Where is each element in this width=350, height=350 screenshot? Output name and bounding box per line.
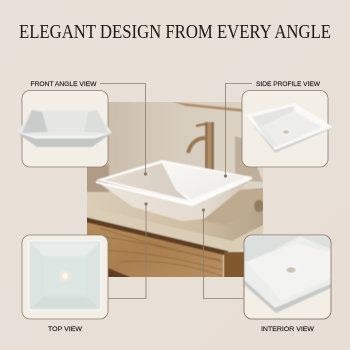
drain <box>59 270 71 282</box>
panel: interior view <box>242 233 333 319</box>
soap dish <box>254 200 264 212</box>
panel: front angle view <box>17 90 112 167</box>
countertop <box>85 188 265 241</box>
sink: interior close-up <box>242 233 333 313</box>
label: top view: TOP VIEW <box>48 326 82 333</box>
drain <box>282 130 290 134</box>
faucet <box>188 122 214 170</box>
label: interior view: INTERIOR VIEW <box>261 326 314 333</box>
vessel sink <box>96 160 252 221</box>
connector: interior view <box>202 209 243 298</box>
vanity drawer <box>85 220 223 279</box>
sink: top view <box>29 241 101 310</box>
connector: front angle <box>100 84 147 175</box>
vanity leg <box>223 251 244 277</box>
sink: side profile <box>245 103 333 153</box>
wall <box>106 102 263 192</box>
drain <box>286 267 296 273</box>
label: front angle view: FRONT ANGLE VIEW <box>30 81 97 88</box>
sink: front angle <box>17 110 112 147</box>
connector: side profile <box>224 84 252 177</box>
panel: top view <box>22 235 108 319</box>
central product photo <box>85 100 265 279</box>
label: side profile view: SIDE PROFILE VIEW <box>256 81 320 88</box>
shelf <box>190 100 243 107</box>
connector: top view <box>108 203 147 298</box>
panel: side profile view <box>242 90 333 167</box>
